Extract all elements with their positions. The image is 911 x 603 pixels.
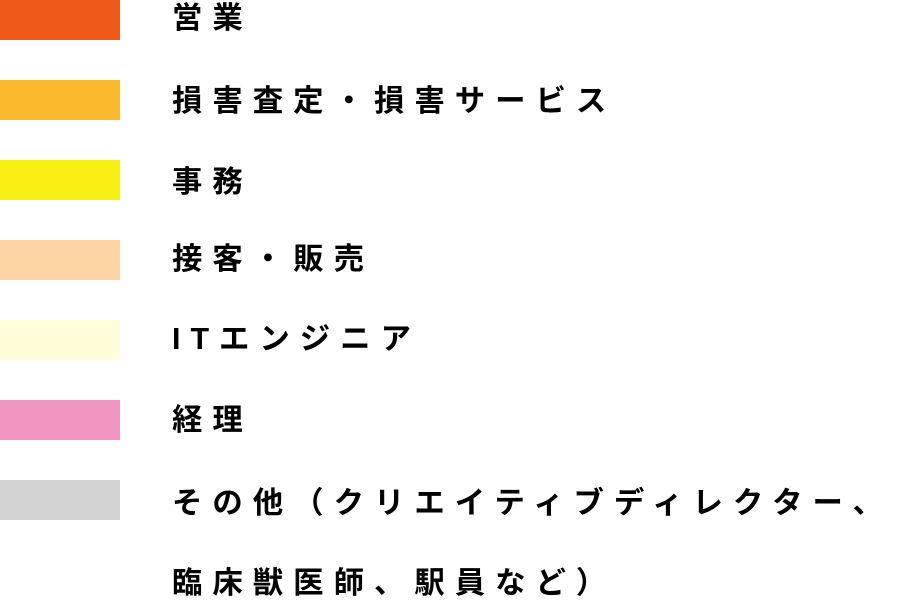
swatch: customer service bbox=[0, 240, 120, 280]
label: other, second line: 臨床獣医師、駅員など） bbox=[172, 566, 616, 600]
swatch: sales bbox=[0, 0, 120, 40]
label: sales: 営業 bbox=[172, 1, 253, 35]
label: accounting: 経理 bbox=[172, 403, 253, 437]
swatch: other bbox=[0, 480, 120, 520]
swatch: accounting bbox=[0, 400, 120, 440]
label: claims: 損害査定・損害サービス bbox=[172, 84, 616, 118]
swatch: claims bbox=[0, 80, 120, 120]
swatch: IT engineer bbox=[0, 320, 120, 360]
swatch: office bbox=[0, 160, 120, 200]
label: other, first line: その他（クリエイティブディレクター、 bbox=[172, 486, 893, 520]
label: IT engineer: ITエンジニア bbox=[172, 322, 421, 356]
label: customer service: 接客・販売 bbox=[172, 242, 374, 276]
label: office: 事務 bbox=[172, 165, 253, 199]
